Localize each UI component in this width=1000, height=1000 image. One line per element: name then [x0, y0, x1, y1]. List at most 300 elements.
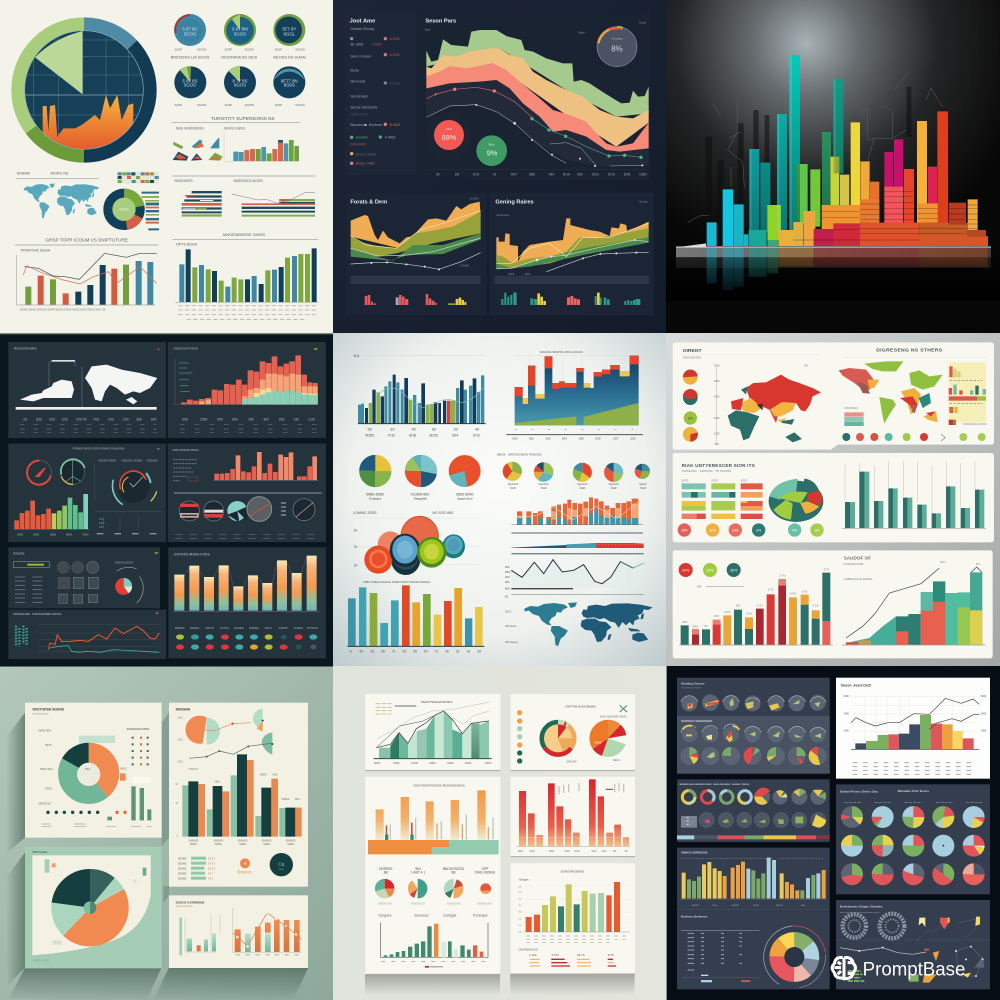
map panel: G00 [62, 417, 68, 421]
stacked bars panel: 360 [249, 417, 254, 421]
card: small bars: SNG [275, 954, 279, 956]
multi bars and small ranges [518, 870, 630, 966]
callout red circle: 88% [442, 133, 457, 142]
gradient stacked bars panel: NSGT [265, 626, 272, 630]
green bars chart [378, 913, 490, 968]
row of small pies: SGR [611, 486, 617, 490]
panel: tile 9 navy dashboards [666, 666, 1000, 1000]
card: donut pie: SNOTGNSH SGGNS [32, 708, 65, 712]
pie captions: DISONAVESS SEIS [221, 55, 258, 60]
card: grouped bars: SNSNGS [188, 841, 199, 843]
heading: line chart [15, 238, 158, 252]
main stacked area chart: 96O [577, 172, 584, 176]
main stacked area chart: Psgrn [578, 30, 585, 34]
card: large pie on green: SMSG NGSNS [33, 961, 50, 963]
axis with ticks: 7595 [714, 363, 720, 367]
bar chart navy: BNGSS [776, 905, 784, 907]
mini stacked charts [173, 137, 223, 161]
grouped bar chart: 5050 [365, 433, 375, 438]
row of small pies: Sgnshsh [608, 482, 619, 486]
pie captions: SGSP [225, 103, 232, 107]
side list [350, 18, 400, 166]
card: grouped bars: SGSNS [178, 878, 187, 880]
white line and bar chart: Sisson .Assoi Dsdt [841, 684, 872, 688]
world map: 303 1 [505, 609, 512, 613]
line chart: BSO [505, 570, 511, 574]
side list: A 4000 [390, 37, 400, 41]
heading and map right: ONOHGSS [844, 406, 858, 410]
four mini pies: ONG NSSNG [475, 871, 496, 875]
side list: Bhng + 0400 [356, 162, 375, 166]
long shadows [7, 713, 308, 999]
pie captions: SGOSS [245, 47, 254, 51]
colourful bar chart: 30 [445, 649, 449, 653]
multi bars and small ranges: 3/7S [608, 953, 614, 957]
colored bars third card: 8.7S [802, 589, 808, 593]
card: two pie charts: SNSG NGSOMSG SMGS [600, 717, 627, 719]
right bars and dials panel [173, 448, 322, 539]
gauge and pie panel [681, 681, 826, 765]
reflection fade [666, 257, 1000, 301]
gradient stacked bars panel: BSRNG [175, 626, 185, 630]
white line and bar chart: 4000 [844, 713, 850, 715]
heading: grouped rows: SNSSSGDS NGGS [233, 179, 263, 183]
gradient stacked bars panel: RGSRG [234, 626, 244, 630]
colored bars third card: 8.3% [746, 612, 753, 616]
colored bars third card: 40% [682, 620, 688, 624]
card: area bars: GSNS [374, 763, 381, 765]
grouped bar chart: TH2 [388, 433, 396, 438]
white line and bar chart: 4000 [981, 713, 987, 715]
line chart: 000 [505, 580, 510, 584]
white line and bar chart: 2000 [844, 731, 850, 733]
heading and heat rows: 28% [681, 528, 688, 532]
row of small pies: Sgnsh [639, 482, 647, 486]
heading and overlapping plates chart: NO SGS NNS [432, 511, 454, 515]
world map: 300 Snsh [505, 624, 517, 628]
heading and map right [839, 347, 986, 426]
three large pies: Sgsgs sdsd [457, 497, 473, 501]
stacked bars panel: 060 [217, 417, 223, 421]
multi bars and small ranges: 3.570 [551, 953, 559, 957]
pie captions: SGOSS [295, 103, 305, 107]
stacked bars panel: G05 [182, 417, 188, 421]
main stacked area chart: Seson Pars [425, 18, 456, 24]
card: grouped bars: 8 5 5 7 [208, 858, 216, 860]
side list: Scontement [350, 94, 368, 98]
red gradient bars [516, 779, 630, 853]
multi bars and small ranges: 26.7S [577, 953, 585, 957]
small pie row 2: 5GOS [184, 83, 196, 88]
side list: Gnanek Shnduy [350, 27, 375, 31]
multi bars and small ranges: 800 [518, 886, 523, 888]
card: grouped bars: A8 [244, 862, 247, 865]
side list: Skonorals [350, 80, 365, 84]
card: orange bars with band: ONS PSGGFSGSGG MGNSNGNSGS [413, 783, 465, 787]
four mini pies: SIN [415, 867, 421, 871]
network lines [688, 72, 943, 222]
colored bars third card: 8.3% [724, 610, 731, 614]
grouped bar chart: NJL [354, 354, 360, 358]
panel captions: Gonps [639, 199, 648, 203]
callout gauge circle: 8% [611, 45, 623, 54]
card: donut pie: SGSSNSH SHGG [32, 713, 49, 715]
heading and heat rows: 19% [732, 528, 739, 532]
three large pies: 3500-5000 [456, 492, 473, 496]
map panel [14, 347, 160, 433]
card: grouped bars: SNG [178, 762, 183, 764]
gradient stacked bars panel: CGSNG [293, 626, 303, 630]
main stacked area chart [425, 18, 649, 176]
multi bars and small ranges: 000 [518, 932, 523, 934]
indicator circles third card: 26% [730, 568, 738, 572]
heading: section mid right: TURISTITY SUPERSIONS NS [211, 116, 274, 121]
main stacked area chart: 8SN [624, 172, 631, 176]
card: grouped bars: 40 [175, 803, 179, 805]
colourful bar chart: 53 [402, 649, 406, 653]
axis with ticks: 3595 [714, 395, 720, 399]
grouped bar chart: 40 [411, 426, 417, 431]
bar chart navy: BSG [801, 905, 806, 907]
bar chart navy: BNGS [753, 905, 760, 907]
heading and overlapping plates chart: 30 [354, 545, 358, 549]
stacked layered chart [506, 350, 643, 441]
grouped bar chart: 3H5 [409, 433, 417, 438]
heading and map right: DIGRESENG NS STHERS [876, 347, 943, 353]
heading: map area: SNSAW [17, 172, 30, 176]
heading and heat rows: 4% [792, 528, 797, 532]
colourful bar chart: 32 [456, 649, 460, 653]
donut legend rows [142, 192, 159, 230]
small pie row 2: 5 87 8S [183, 79, 198, 84]
gauges and bar panel: RSSOOS SONIO [122, 458, 142, 462]
side list: A 5000 [390, 82, 400, 86]
heading and left indicators: 8A [688, 416, 693, 421]
panel captions [460, 196, 648, 276]
colored bars third card: 4.2% [813, 603, 819, 607]
heading and left indicators: OIRENT [683, 348, 702, 354]
pie captions: SGOSS [197, 103, 207, 107]
panel: tile 1 light report with radar pie [0, 0, 333, 333]
side list: Suncie Sbnstdorte [350, 106, 378, 110]
chart panel: Gening Raires [495, 199, 649, 305]
panel: tile 5 bright multi chart [333, 333, 666, 666]
multi bars and small ranges: 300 [518, 912, 523, 914]
stacked rows left [182, 191, 222, 217]
floor platform [676, 243, 991, 268]
bars [707, 55, 988, 246]
stacked bars panel: 330 [294, 417, 299, 421]
backdrop shadow bars [705, 87, 911, 223]
heading and heat rows: TRNGGSG · GROGSS · TR GGNGS [682, 469, 731, 473]
small pie row 1: 5F7 8Y [282, 27, 296, 32]
heading and step area chart: SAUDOF OF [844, 556, 871, 561]
card: two pie charts: SNGS [613, 760, 620, 762]
red gradient bars: SGG [565, 851, 570, 853]
white line and bar chart: 2000 [981, 731, 987, 733]
heading and heat rows: 20% [709, 528, 716, 532]
3D donut [769, 479, 823, 522]
side list: A 4000 [385, 136, 396, 140]
pie captions: NEOSS AS SHAN [273, 55, 306, 60]
stacked bars panel: 800 [232, 417, 238, 421]
radial chart [23, 30, 147, 150]
side list: Bhnsel 00060 [356, 152, 376, 156]
stacked layered chart: 300 [529, 437, 534, 441]
card: grouped bars: NSNGNH [176, 708, 191, 712]
red gradient bars: SGG [591, 851, 597, 853]
card: two pie charts: SNGSMG [566, 762, 577, 764]
card: grouped bars: 8 5 5 5 [208, 868, 216, 870]
donuts panel: SNGMNG SGNS GNMSGRS SMSG · SNGS GMGGNSS · SGGSNG · DNSGS [679, 784, 750, 786]
heading: grouped rows [172, 176, 315, 183]
gradient stacked bars panel: CSPTR [205, 626, 214, 630]
three large pies: Dsgsgdsh [414, 497, 427, 501]
side list: Bosta [350, 68, 359, 72]
heading and step area chart: 81% [940, 560, 946, 564]
card: grouped bars: SGSNG [178, 873, 187, 875]
heading and overlapping plates chart [353, 511, 480, 575]
small pie row 1: 5GOS [234, 31, 246, 36]
card: grouped bars: 8 5 5 5 [208, 863, 216, 865]
pie captions: SGSP [275, 47, 282, 51]
pie captions: SGOSS [197, 47, 207, 51]
small pie row 1: 5 87 8C [182, 27, 198, 32]
four mini pies: SNSGNG NG [478, 903, 492, 905]
world map: 300 Sgnsg [505, 640, 518, 644]
heading: grouped rows: SNSDNSSS [174, 179, 193, 183]
card: donut pie: SMSG NGG [38, 731, 51, 733]
red gradient bars: SGG [518, 851, 523, 853]
card: grouped bars: SMSG [260, 774, 267, 776]
card: donut pie: SNGS [45, 745, 52, 747]
dense stacked bars [511, 497, 643, 533]
callout red circle: AHO [446, 127, 453, 131]
gauges and bar panel: 0000 [33, 533, 40, 537]
stacked bars panel: 650 [279, 417, 285, 421]
red gradient bars: SG [613, 851, 617, 853]
card: area bars: GSNS [485, 763, 492, 765]
donuts panel [677, 784, 830, 839]
grouped bar chart: 3020 [429, 433, 439, 438]
bar chart navy: SNGSN [732, 905, 739, 907]
card: area bars [374, 700, 492, 765]
multi bars and small ranges: 400 [518, 905, 523, 907]
colourful bar chart: AHBG SSBGS MGSSG SGBGS DSHT DNGSS MSNGG [363, 580, 430, 584]
small pie row 2: 8G0S [284, 83, 295, 88]
map panel: C00 [49, 417, 55, 421]
chart panel: Forats and Dem [350, 199, 481, 305]
side list: Bostoran [369, 123, 382, 127]
colourful bar chart: 16 [466, 649, 470, 653]
card: grouped bars: SMSG [190, 844, 197, 846]
card: grouped bars: SNS [273, 774, 278, 776]
multi bars and small ranges: SGNSTMGSRGS [561, 870, 584, 874]
row of small pies: DBOS · MNTSSG0IGG PSNOGE [497, 453, 542, 457]
multi bars and small ranges: 200 [518, 918, 523, 920]
card: donut pie [32, 708, 152, 827]
side list: 08 .0000 [350, 43, 363, 47]
main stacked area chart: SOG [592, 172, 599, 176]
grouped bar chart: 60 [432, 426, 437, 431]
card: area bars: GSNS [447, 763, 454, 765]
side list: 2000 4000 [350, 142, 366, 146]
bar chart navy: BSG [713, 905, 717, 907]
line chart panel: NRSNSGSSP · PORGSANSRE SMOTE [13, 612, 61, 616]
card: large pie on green: SMTGGSH [32, 850, 47, 854]
small pie row 2: 8GOS [234, 83, 246, 88]
gauge and pie panel: SGNOGG SMGSSHNS [681, 719, 712, 723]
indicator circles third card: 29% [682, 568, 690, 572]
table and donut: Nsdnory Bnokents [681, 915, 708, 919]
axis with ticks [714, 363, 808, 446]
chart panel: Forats and Dem: Forats & Dem [350, 199, 387, 205]
colourful bar chart: A [350, 649, 353, 653]
colored bars third card: 205 [736, 603, 741, 607]
card: donut pie: SNGS [120, 768, 127, 770]
strip chart [511, 543, 644, 554]
axis with ticks: NS [804, 363, 808, 367]
legend grid [117, 172, 159, 184]
grouped bar chart: 40 [475, 426, 480, 431]
grouped bar chart: 304 [452, 433, 459, 438]
pie captions: SGSP [275, 103, 282, 107]
heading and left indicators: RNGOBGGW [683, 355, 701, 359]
control panel with mini pie [13, 552, 159, 603]
card: grouped bars: SMSG [263, 844, 270, 846]
white line and bar chart: 8000 [844, 696, 850, 698]
white line and bar chart [836, 678, 990, 779]
heading and overlapping plates chart: LOMNS JGSS [353, 511, 377, 515]
small pie row 2 [174, 66, 305, 98]
donut chart: 5GGS [119, 208, 129, 212]
panel captions: S 6000 [460, 264, 469, 268]
pie captions [171, 47, 306, 107]
gradient stacked bars panel: GOTRSS IRSNG FODS [174, 552, 210, 556]
small pie row 1 [174, 14, 305, 46]
card: area bars: SNOPTSMGGNSPSPS [421, 700, 452, 704]
colourful bar chart [347, 580, 484, 653]
card: grouped bars: SGG [279, 869, 284, 871]
grouped bar chart: 56 [367, 426, 373, 431]
green bars chart: Ponsnges [473, 913, 488, 917]
stacked bars panel: G30 [309, 417, 315, 421]
card: donut pie: SMSG SNG [40, 769, 53, 771]
world map [505, 602, 653, 646]
card: grouped bars: 8 5 7 [208, 873, 214, 875]
card: large pie on green [32, 850, 151, 963]
card: donut pie: SGG [85, 769, 90, 771]
red gradient bars: SGG [575, 851, 580, 853]
heading: map area [16, 172, 99, 178]
card: grouped bars: SNSNGS [188, 769, 199, 771]
main stacked area chart: 8BE [529, 172, 536, 176]
indicator circles third card: 98G [697, 586, 702, 588]
main stacked area chart: NOA [563, 172, 571, 176]
card: small bars: SNG [295, 954, 299, 956]
callout green circle: 9% [487, 148, 498, 157]
colourful bar chart: 7H [424, 649, 428, 653]
pie captions: SGSP [175, 103, 182, 107]
stacked layered chart: 500 [596, 437, 601, 441]
card: grouped bars: SNS [215, 781, 220, 783]
colored bars third card: 39% [693, 625, 699, 629]
row of badges [842, 433, 986, 441]
small pie row 2: 8F77 8N [281, 79, 298, 84]
bar chart navy: SNNOS SMNSGNS [681, 851, 708, 855]
colored bars third card: 82 [705, 624, 708, 628]
green bars chart: Contigos [443, 913, 457, 917]
card: two pie charts: SGNS [594, 740, 602, 744]
bar chart navy: BSGNS [692, 905, 700, 907]
card: two pie charts: OSPTOH NGSGMMNS [565, 704, 596, 708]
multi bars and small ranges: CNVRSMGGSS [518, 947, 538, 951]
gauges and bar panel: 0000 [66, 533, 72, 537]
colourful bar chart: 35 [413, 649, 417, 653]
colourful bar chart: 96 [381, 649, 385, 653]
pie grid panel [840, 789, 983, 880]
four mini pies: SNSGNG NG [378, 903, 392, 905]
gradient stacked bars panel: RSSNG [190, 626, 199, 630]
main stacked area chart: ART [511, 172, 517, 176]
panel: tile 2 dark dashboard [333, 0, 666, 333]
callout red circle [426, 112, 472, 158]
map panel: 800 [137, 417, 142, 421]
row of small pies: SGR [541, 486, 547, 490]
map panel: C00 [108, 417, 114, 421]
card: donut pie: SGSSSGGNG SMSG [127, 729, 149, 731]
map left red [728, 375, 821, 442]
callout gauge circle: Srsosgo [612, 36, 623, 40]
main stacked area chart: 8IN [549, 172, 555, 176]
indicator circles third card: 25% [706, 568, 714, 572]
multi bars and small ranges: 100 [518, 925, 523, 927]
grouped bar chart [354, 354, 486, 438]
card: grouped bars: 0 [177, 836, 179, 838]
four mini pies [378, 867, 496, 905]
stacked rows with line [232, 193, 315, 217]
heading and heat rows: SGGS [711, 480, 719, 482]
network panel: Boilndworits Stmglo Shotaths [840, 905, 883, 909]
line chart: 800 [505, 587, 510, 591]
card: grouped bars: SNSGS [281, 799, 290, 801]
colored bars third card: 8.0% [790, 592, 797, 596]
colored bars third card: 3.7% [779, 573, 786, 577]
card: donut pie: SGNG [45, 788, 52, 790]
pie captions: SGOSS [295, 47, 305, 51]
map panel: C00 [123, 417, 129, 421]
gradient stacked bars panel: RSRNG [249, 626, 259, 630]
pie grid panel: Dalnta Phoens Skitiss Seq [840, 790, 878, 794]
three large pies: D1900-500 [411, 492, 429, 496]
card: grouped bars: SMSG [287, 844, 294, 846]
panel: tile 4 dark dashboards [0, 333, 333, 666]
side list: Bhoranone [350, 123, 367, 127]
side list: Sonk ot Soeul [350, 54, 371, 58]
table and donut [677, 909, 830, 988]
four mini pies: 1 ABT 4 1 [411, 871, 425, 875]
heading and step area chart [842, 556, 985, 645]
stacked layered chart: SOGNOG SRGPOG SPOG GOGSS [540, 350, 583, 354]
map panel: 600 [151, 417, 157, 421]
bar reflections [707, 248, 988, 290]
main stacked area chart: Sorgo [639, 20, 647, 24]
pie captions: SGSP [225, 47, 232, 51]
card: grouped bars: SNG [178, 717, 183, 719]
gauge and pie panel: Shntling Soncoe [681, 681, 705, 685]
heading: section mid right [172, 116, 300, 130]
main stacked area chart: 180D [639, 172, 648, 176]
